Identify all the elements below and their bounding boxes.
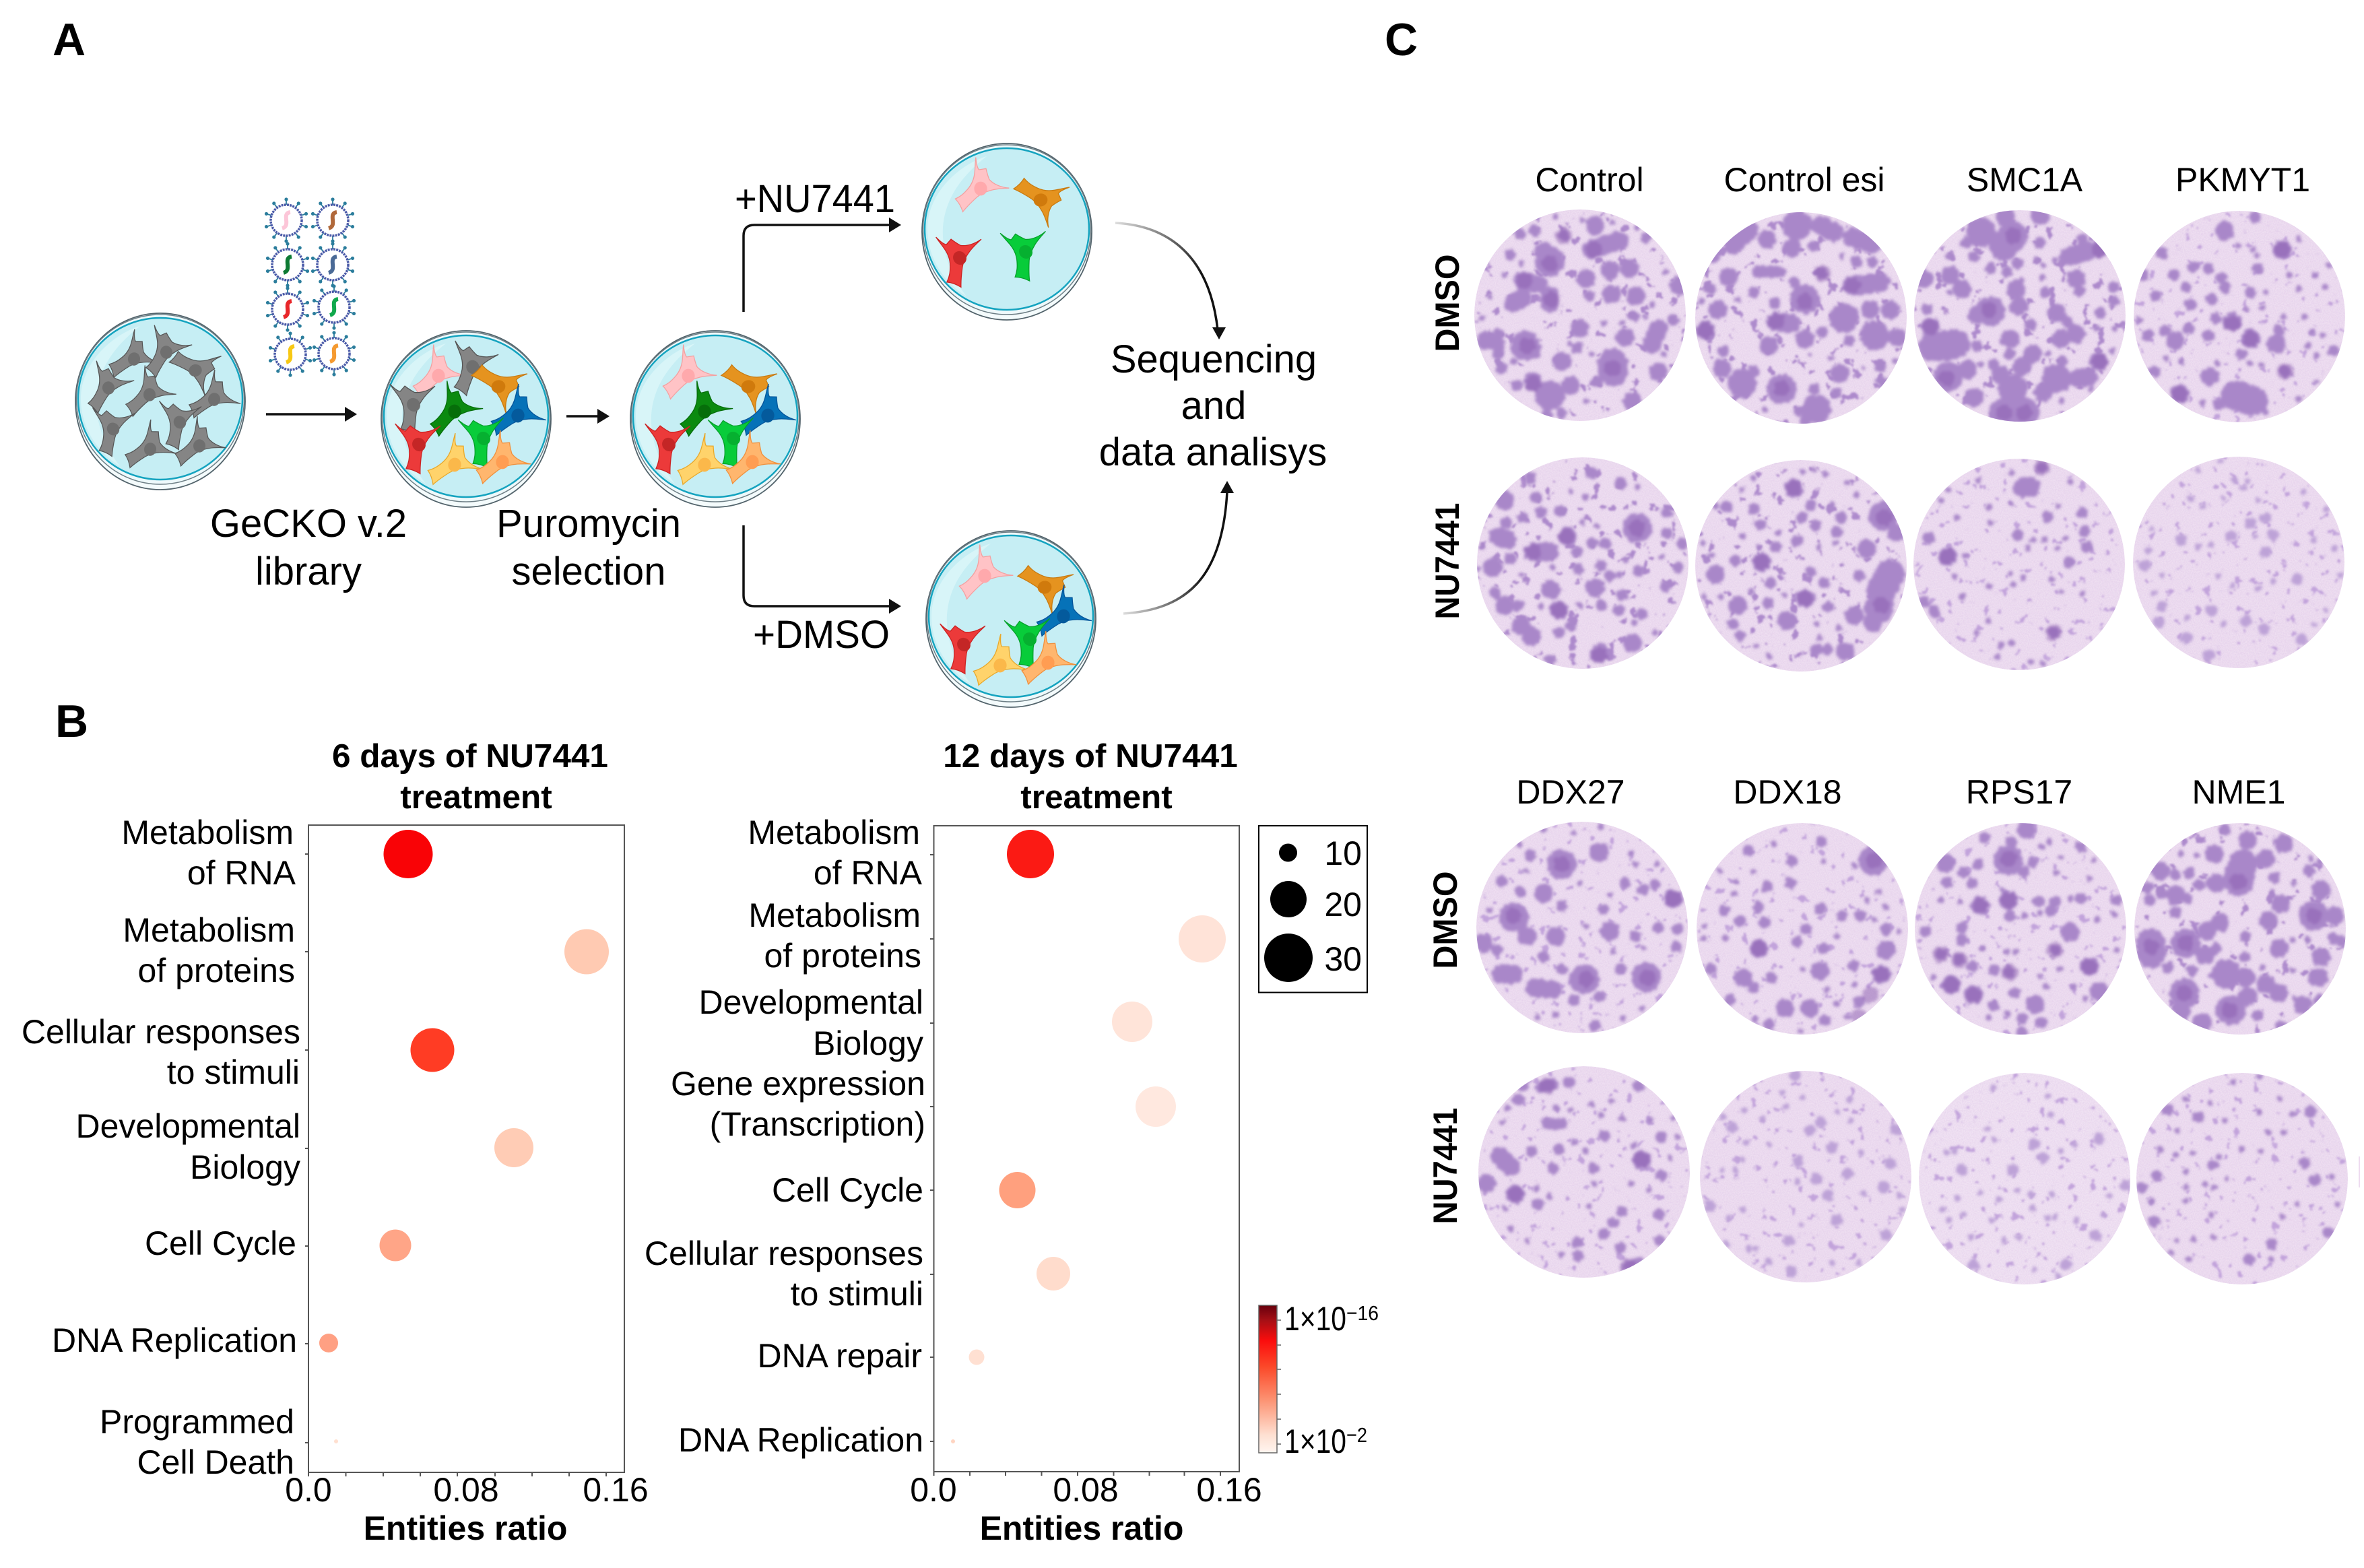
arrow: to NU7441 arm bbox=[744, 218, 901, 312]
legend: p-value colour bar: 1×10 bbox=[1284, 1300, 1346, 1338]
x axis labels bbox=[285, 1471, 649, 1509]
category labels: to stimuli bbox=[791, 1275, 923, 1313]
text: sequencing and data analysis: and bbox=[1181, 384, 1246, 428]
arrow: to DMSO arm bbox=[744, 525, 901, 614]
column headers: PKMYT1 bbox=[2175, 161, 2310, 199]
category labels: of RNA bbox=[187, 854, 296, 892]
category labels: DNA repair bbox=[757, 1337, 922, 1375]
column headers: RPS17 bbox=[1966, 773, 2072, 811]
legend: bubble size: 20 bbox=[1324, 886, 1362, 923]
plate: RPS17 DMSO bbox=[1915, 823, 2126, 1035]
column headers: SMC1A bbox=[1967, 161, 2083, 199]
legend: p-value colour bar: −2 bbox=[1346, 1423, 1367, 1447]
petri dish: untreated grey cells bbox=[75, 313, 246, 490]
plate: Control esi DMSO bbox=[1695, 212, 1907, 424]
column headers bbox=[1535, 161, 2310, 199]
bubbles bbox=[951, 830, 1226, 1443]
category labels: DNA Replication bbox=[52, 1321, 297, 1359]
text: GeCKO library: GeCKO v.2 bbox=[210, 502, 407, 546]
row label NU7441: NU7441 bbox=[1429, 502, 1466, 620]
x axis labels bbox=[910, 1471, 1262, 1509]
category labels: Cellular responses bbox=[22, 1013, 300, 1051]
category labels: to stimuli bbox=[167, 1053, 300, 1091]
category labels: Developmental bbox=[698, 983, 923, 1021]
text: puromycin selection: selection bbox=[512, 550, 665, 593]
legend: bubble size bbox=[1259, 826, 1367, 993]
category labels: (Transcription) bbox=[710, 1105, 925, 1143]
category labels: Programmed bbox=[100, 1403, 294, 1441]
petri dish: DMSO treated bbox=[924, 531, 1097, 707]
curved arrow: DMSO to sequencing bbox=[1123, 481, 1234, 614]
plate: PKMYT1 NU7441 bbox=[2133, 457, 2344, 668]
legend: p-value colour bar: −16 bbox=[1346, 1301, 1379, 1325]
text: sequencing and data analysis: Sequencing bbox=[1111, 337, 1317, 381]
x axis labels: 0.0 bbox=[285, 1471, 332, 1509]
panel A: screening workflow bbox=[75, 143, 1327, 707]
legend: p-value colour bar bbox=[1259, 1300, 1379, 1460]
category labels: Metabolism bbox=[121, 814, 294, 851]
plate: RPS17 NU7441 bbox=[1919, 1073, 2130, 1284]
category labels bbox=[645, 814, 925, 1459]
icon: lentiviral library particles bbox=[264, 197, 356, 377]
category labels: of RNA bbox=[814, 854, 923, 892]
petri dish: transduced mixed cells bbox=[374, 327, 552, 507]
panel B: 12 days bubble chart bbox=[645, 738, 1262, 1547]
category labels: Cell Cycle bbox=[772, 1171, 923, 1209]
text: puromycin selection: Puromycin bbox=[496, 502, 681, 546]
panel label C: C bbox=[1385, 14, 1418, 65]
chart title: treatment bbox=[400, 779, 552, 816]
label: +DMSO: +DMSO bbox=[753, 613, 890, 657]
panel C: clonogenic assay plates, first set bbox=[1429, 161, 2345, 672]
plate: SMC1A NU7441 bbox=[1913, 459, 2125, 670]
category labels: of proteins bbox=[138, 952, 295, 989]
column headers: DDX27 bbox=[1516, 773, 1625, 811]
category labels: Biology bbox=[190, 1148, 300, 1186]
chart title: 6 days of NU7441 bbox=[332, 738, 608, 775]
row label DMSO: DMSO bbox=[1429, 255, 1466, 352]
bubbles bbox=[319, 830, 609, 1443]
petri dish: NU7441 treated bbox=[920, 143, 1092, 320]
column headers: Control bbox=[1535, 161, 1644, 199]
chart title: treatment bbox=[1020, 779, 1173, 816]
plate: DDX27 NU7441 bbox=[1478, 1066, 1690, 1278]
text: GeCKO library: library bbox=[255, 550, 362, 593]
category labels: DNA Replication bbox=[678, 1421, 923, 1459]
category labels: Cell Death bbox=[137, 1443, 294, 1481]
category labels: Cellular responses bbox=[645, 1235, 923, 1272]
x axis title: Entities ratio bbox=[364, 1509, 567, 1547]
plate: PKMYT1 DMSO bbox=[2134, 211, 2345, 422]
text: sequencing and data analysis: data analisys bbox=[1099, 430, 1327, 474]
category labels bbox=[22, 814, 300, 1481]
chart title bbox=[332, 738, 608, 816]
category labels: Cell Cycle bbox=[145, 1224, 296, 1262]
plot frame bbox=[308, 825, 624, 1472]
column headers: DDX18 bbox=[1733, 773, 1842, 811]
legend: p-value colour bar: 1×10 bbox=[1284, 1423, 1346, 1460]
arrow: infection bbox=[266, 407, 357, 422]
column headers bbox=[1516, 773, 2285, 811]
x axis labels: 0.08 bbox=[1053, 1471, 1119, 1509]
x axis labels: 0.16 bbox=[1196, 1471, 1262, 1509]
column headers: NME1 bbox=[2192, 773, 2285, 811]
column headers: Control esi bbox=[1724, 161, 1884, 199]
category labels: Metabolism bbox=[748, 814, 920, 851]
plate: NME1 DMSO bbox=[2134, 823, 2346, 1035]
category labels: Metabolism bbox=[123, 911, 295, 949]
plate: Control NU7441 bbox=[1477, 457, 1688, 669]
plate: Control DMSO bbox=[1474, 209, 1686, 421]
plate: DDX18 DMSO bbox=[1697, 823, 1908, 1035]
panel label A: A bbox=[53, 14, 86, 65]
row label DMSO: DMSO bbox=[1426, 872, 1464, 969]
chart title bbox=[943, 738, 1238, 816]
plate: Control esi NU7441 bbox=[1695, 460, 1907, 672]
label: +NU7441: +NU7441 bbox=[735, 177, 895, 221]
plate: NME1 NU7441 bbox=[2136, 1073, 2348, 1284]
curved arrow: NU7441 to sequencing bbox=[1115, 223, 1226, 339]
panel B: 6 days bubble chart bbox=[22, 738, 649, 1547]
category labels: of proteins bbox=[764, 937, 921, 975]
x axis labels: 0.16 bbox=[583, 1471, 649, 1509]
text: GeCKO library bbox=[210, 502, 407, 593]
legend: bubble size: 10 bbox=[1324, 835, 1362, 872]
arrow: selection bbox=[566, 409, 610, 424]
x axis labels: 0.0 bbox=[910, 1471, 957, 1509]
plate: DDX27 DMSO bbox=[1476, 822, 1688, 1033]
text: sequencing and data analysis bbox=[1099, 337, 1327, 474]
chart title: 12 days of NU7441 bbox=[943, 738, 1238, 775]
text: puromycin selection bbox=[496, 502, 681, 593]
category labels: Gene expression bbox=[671, 1065, 925, 1103]
category labels: Developmental bbox=[75, 1107, 300, 1145]
panel C: clonogenic assay plates, second set bbox=[1426, 773, 2348, 1284]
plot frame bbox=[933, 826, 1239, 1472]
row label NU7441: NU7441 bbox=[1426, 1107, 1464, 1224]
x axis labels: 0.08 bbox=[433, 1471, 499, 1509]
x axis title: Entities ratio bbox=[980, 1509, 1183, 1547]
plate: DDX18 NU7441 bbox=[1700, 1071, 1911, 1282]
panel label B: B bbox=[55, 696, 88, 747]
plate: SMC1A DMSO bbox=[1914, 210, 2126, 422]
petri dish: after puromycin selection bbox=[629, 331, 801, 507]
legend: bubble size: 30 bbox=[1324, 940, 1362, 978]
category labels: Biology bbox=[813, 1024, 923, 1062]
category labels: Metabolism bbox=[748, 896, 921, 934]
